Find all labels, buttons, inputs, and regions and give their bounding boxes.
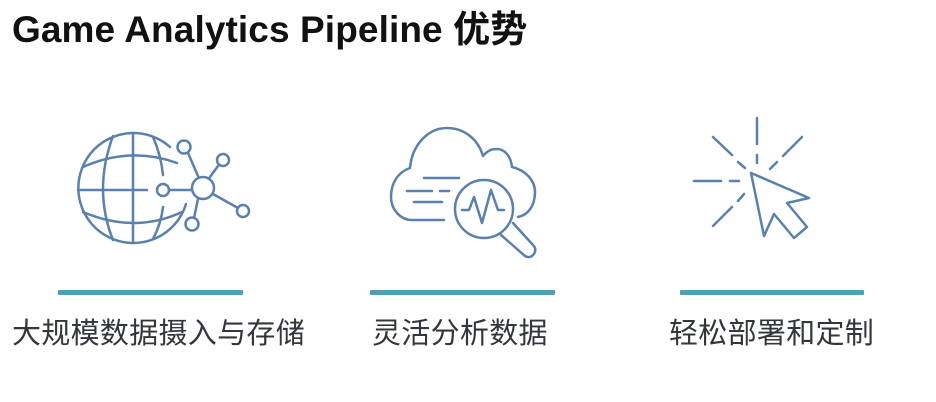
divider bar: column 3 — [680, 290, 864, 295]
label: column 3: 轻松部署和定制 — [669, 318, 874, 350]
title: Game Analytics Pipeline 优势 — [12, 9, 527, 50]
label: column 2: 灵活分析数据 — [372, 318, 548, 350]
label: column 1: 大规模数据摄入与存储 — [12, 318, 305, 350]
divider bar: column 2 — [370, 290, 555, 295]
divider bar: column 1 — [58, 290, 243, 295]
